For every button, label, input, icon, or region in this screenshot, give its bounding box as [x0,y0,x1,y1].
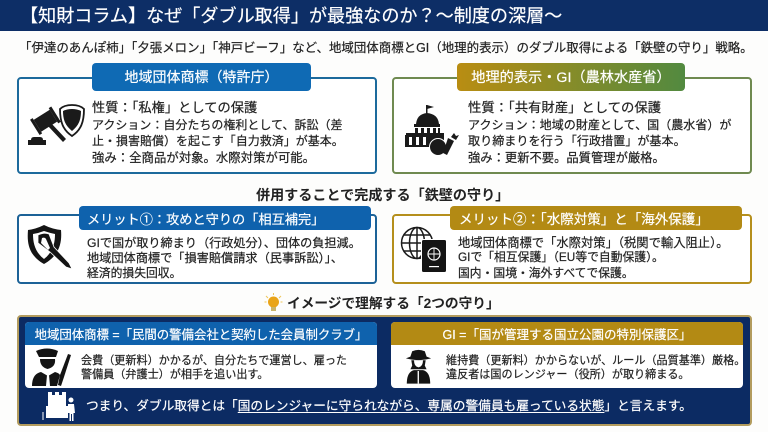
header: regional trademark: 地域団体商標（特許庁） [124,69,278,85]
panel: merit 1: 地域団体商標で「損害賠償請求（民事訴訟）」、 [87,251,343,265]
icon: globe and passport [400,226,446,272]
intro text: 「伊達のあんぽ柿」「夕張メロン」「神戸ビーフ」など、地域団体商標とGI（地理的表示）のダブル取得による「鉄壁の守り」戦略。 [19,41,753,55]
card: national park: 維持費（更新料）かからないが、ルール（品質基準）厳格。 [446,354,745,366]
header: GI: 地理的表示・GI（農林水産省） [471,70,671,86]
title bar [0,0,768,31]
icon: government building and vegetables [405,105,459,155]
card: national park: 違反者は国のレンジャー（役所）が取り締まる。 [446,369,690,381]
panel: merit 2: GIで「相互保護」（EU等で自動保護）。 [458,250,664,264]
header: merit 1: メリット①：攻めと守りの「相互補完」 [87,212,324,226]
panel: merit 1: 経済的損失回収。 [87,266,181,280]
card: private security club [25,322,377,388]
text: merit 1 details [87,236,361,280]
panel: geographical indication [392,63,752,174]
panel: regional trademark [17,63,377,174]
text: GI details [468,100,732,165]
card header: private security club: 地域団体商標 =「民間の警備会社と契約した会員制クラブ」 [35,328,367,342]
text: regional trademark details [92,100,344,165]
panel: geographical indication: 取り締まりを行う「行政措置」が基本。 [468,134,686,148]
header: merit 1 [79,206,371,230]
text: merit 2 details [458,236,729,280]
panel: regional trademark: 性質：「私権」としての保護 [92,100,257,114]
summary text: つまり、ダブル取得とは「国のレンジャーに守られながら、専属の警備員も雇っている状態」と言えます。 [86,398,692,412]
header: merit 2: メリット②：「水際対策」と「海外保護」 [459,212,709,227]
panel: regional trademark: 止・損害賠償）を起こす「自力救済」が基本。 [92,134,344,148]
panel: metaphor [17,315,752,426]
panel: geographical indication: 性質：「共有財産」としての保護 [468,100,661,114]
card header: national park: GI =「国が管理する国立公園の特別保護区」 [442,328,691,342]
icon: lightbulb [264,293,282,311]
header: GI [457,63,685,91]
card: private security club: 警備員（弁護士）が相手を追い出す。 [81,369,268,381]
heading: combined use: 併用することで完成する「鉄壁の守り」 [256,186,509,202]
icon: shield and sword [28,225,72,268]
panel: merit 1 [17,206,377,284]
panel: geographical indication: アクション：地域の財産として、国（農水省）が [468,118,731,132]
panel: merit 2: 国内・国境・海外すべてで保護。 [458,266,634,280]
panel: regional trademark: 強み：全商品が対象。水際対策が可能。 [92,151,315,165]
panel: merit 2 [392,206,752,284]
text: private security club details [81,354,347,381]
icon: ranger [406,350,431,384]
card: national park [391,322,743,388]
card header: national park [391,322,743,345]
card: private security club: 会費（更新料）かかるが、自分たちで運営し、雇った [81,354,347,366]
text: national park details [446,354,745,381]
header: regional trademark [92,63,311,91]
panel: merit 2: 地域団体商標で「水際対策」（税関で輸入阻止）。 [458,236,729,250]
heading: understanding by image: イメージで理解する「2つの守り」 [287,296,500,311]
icon: gavel and shield [28,104,85,145]
icon: security guard [32,348,71,386]
panel: geographical indication: 強み：更新不要。品質管理が厳格。 [468,151,665,165]
icon: castle and ranger [42,392,75,421]
panel: merit 1: GIで国が取り締まり（行政処分）、団体の負担減。 [87,236,361,250]
header: merit 2 [450,206,742,230]
title: 【知財コラム】なぜ「ダブル取得」が最強なのか？～制度の深層～ [20,6,562,26]
panel: regional trademark: アクション：自分たちの権利として、訴訟（差 [92,118,342,132]
card header: private security club [25,322,377,345]
